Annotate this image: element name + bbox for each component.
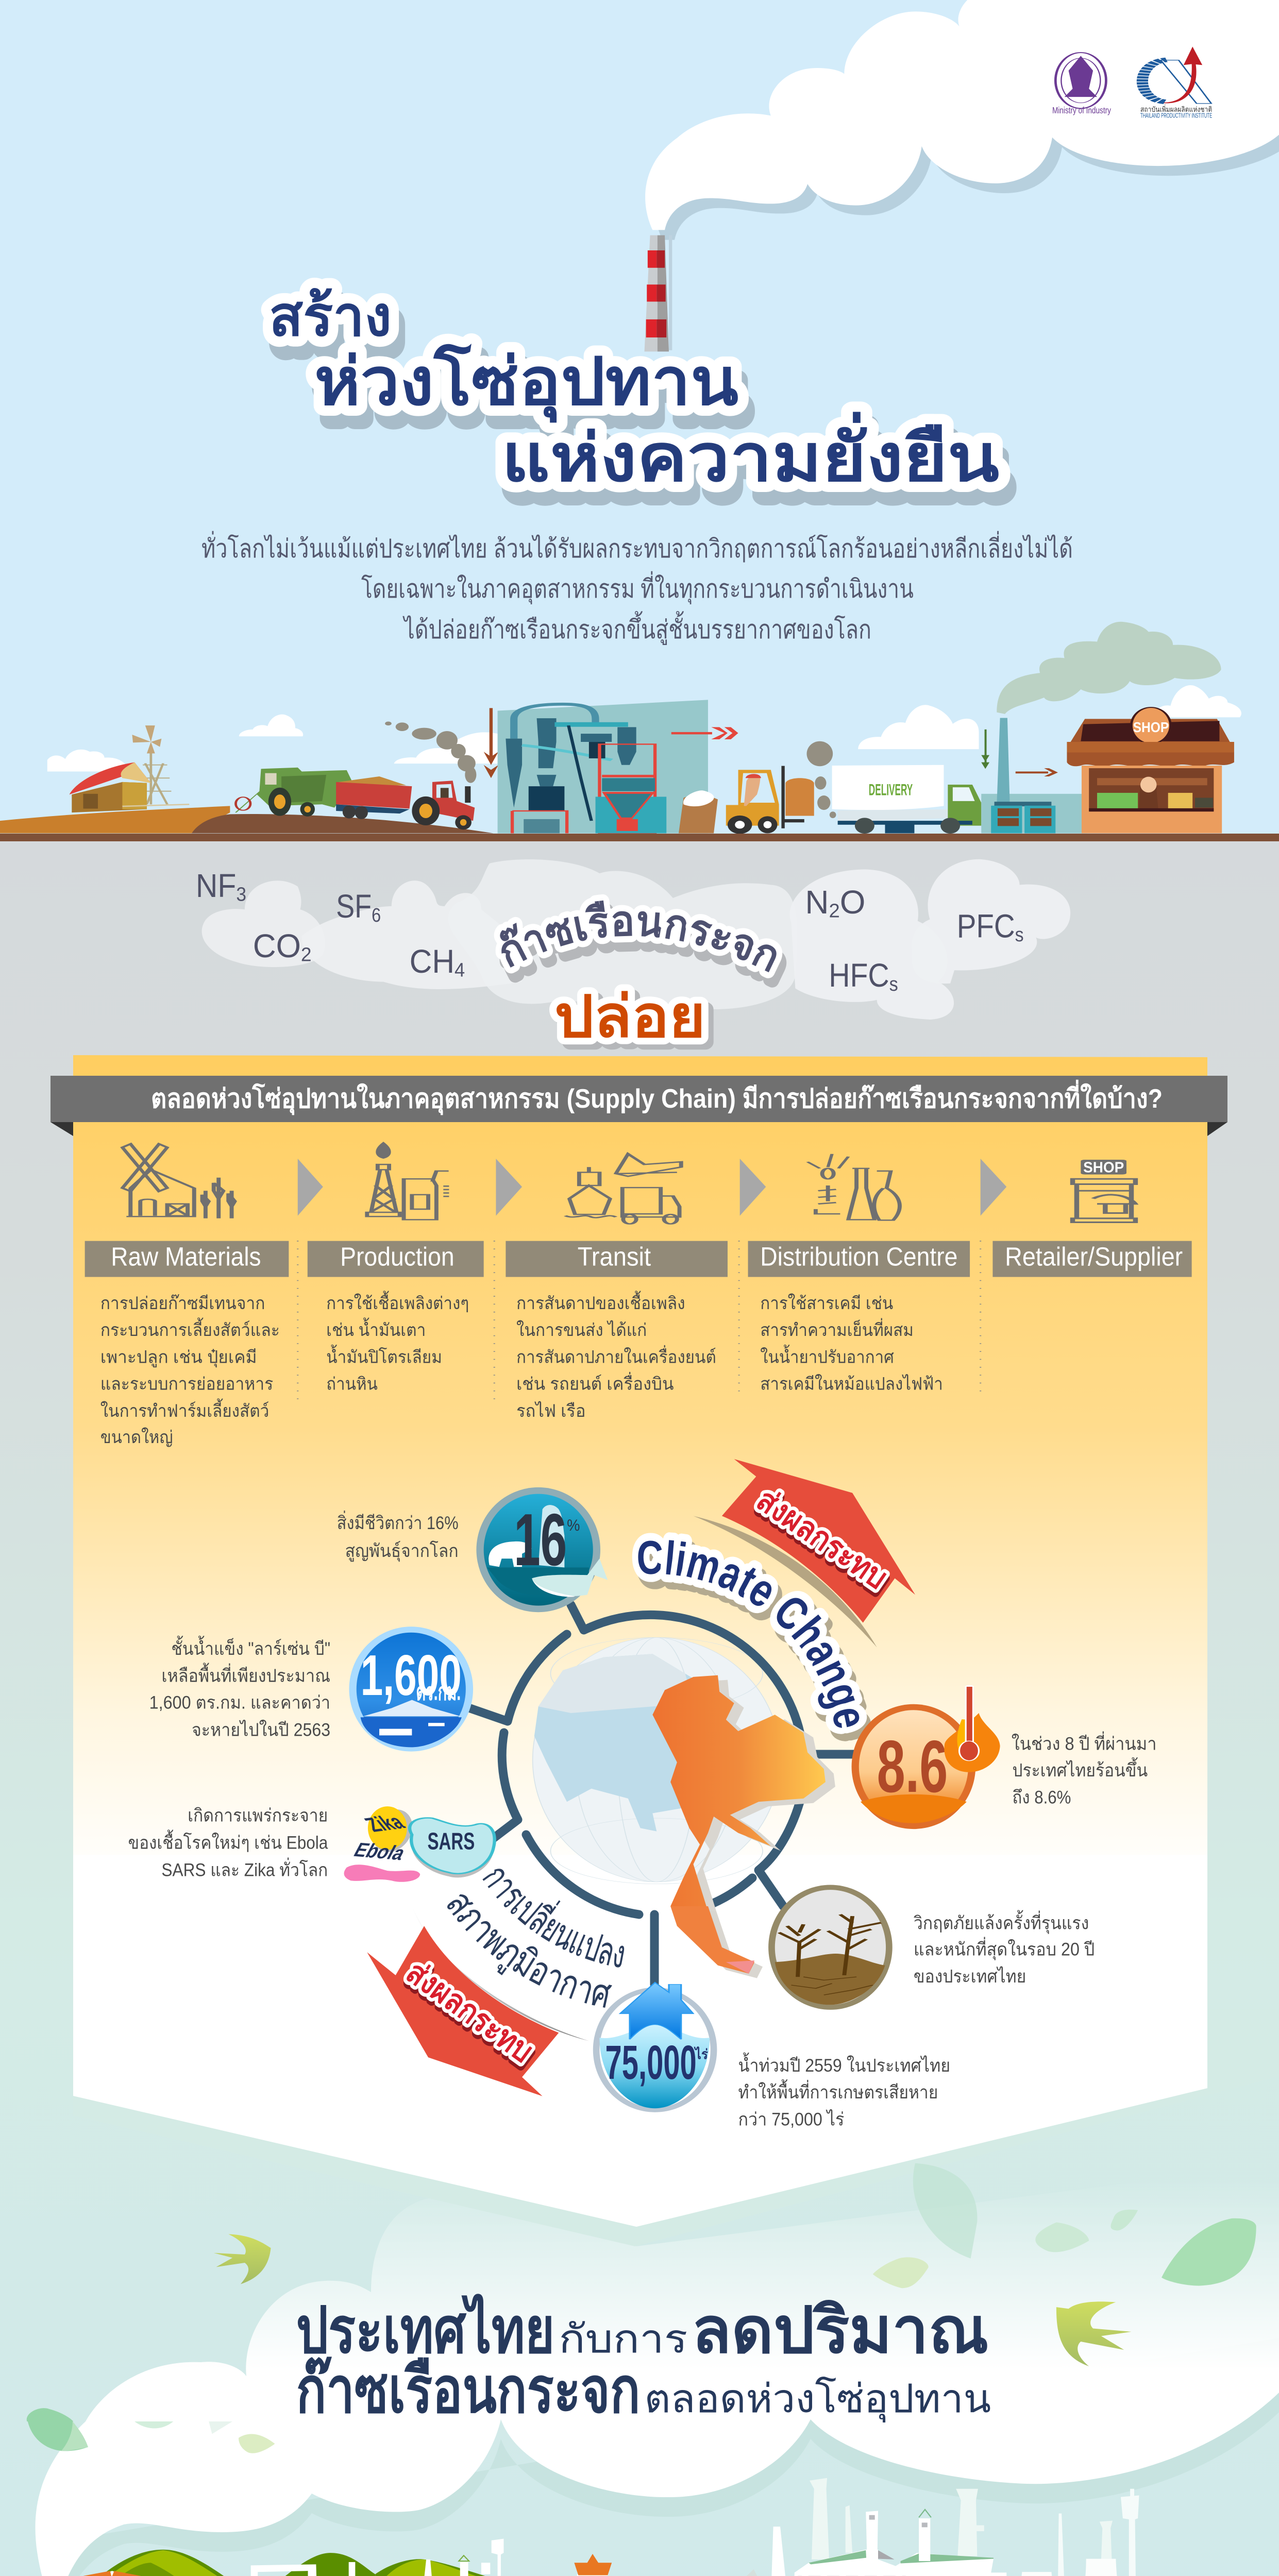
climate change diagram: ชั้นน้ำแข็ง "ลาร์เซ่น บี"	[171, 1636, 330, 1659]
gas formulas: N	[805, 884, 864, 921]
gas formulas: 2	[829, 900, 840, 922]
icon: combine harvester	[235, 768, 352, 817]
gas formulas: HFC	[829, 957, 997, 994]
climate change diagram: 16	[514, 1498, 567, 1581]
ground strip	[0, 834, 1279, 841]
heading: Thailand reducing greenhouse gas	[296, 2294, 991, 2426]
gas formulas: 2	[301, 943, 312, 965]
title: ห่วงโซ่อุปทาน	[321, 357, 745, 436]
icon: ship plane truck	[565, 1154, 681, 1224]
text: drought	[914, 1910, 1095, 1987]
climate change diagram: ทำให้พื้นที่การเกษตรเสียหาย	[738, 2079, 938, 2103]
gas formulas: 3	[236, 883, 246, 905]
supply chain stages: SHOP	[1083, 1159, 1124, 1176]
gas formulas: O	[840, 884, 865, 921]
label: Transit	[506, 1241, 728, 1277]
gas formulas: 4	[455, 959, 465, 981]
icon: wheat field and barn	[0, 762, 494, 833]
panel: industrial level	[650, 2478, 1207, 2576]
icon: green hills and town	[68, 2539, 628, 2576]
gas formulas: 6	[372, 904, 381, 926]
text: distribution detail	[760, 1293, 943, 1394]
climate change diagram: ของเชื้อโรคใหม่ๆ เช่น Ebola	[128, 1829, 328, 1853]
stat: diseases icons	[344, 1806, 495, 1882]
climate change diagram: 75,000	[605, 2036, 697, 2089]
text: temperature	[1012, 1731, 1157, 1807]
text: flood	[738, 2052, 950, 2129]
supply chain stages: เพาะปลูก เช่น ปุ๋ยเคมี	[100, 1347, 257, 1368]
icon: truck smoke	[806, 741, 836, 818]
gas formulas: CO	[253, 927, 375, 964]
globe	[533, 1637, 781, 1884]
text: larsen ice	[149, 1636, 330, 1740]
climate change diagram: สิ่งมีชีวิตกว่า 16%	[337, 1510, 459, 1533]
intro text: โดยเฉพาะในภาคอุตสาหกรรม ที่ในทุกกระบวนการดำเนินงาน	[361, 571, 914, 604]
climate change diagram: เกิดการแพร่กระจาย	[188, 1805, 328, 1825]
text: production detail	[326, 1291, 469, 1394]
icon: forklift	[726, 766, 814, 834]
climate change diagram	[128, 1459, 1157, 2129]
icon: tractor with trailer	[336, 776, 475, 829]
icon: shop	[1073, 1159, 1135, 1222]
stat: 16 percent	[476, 1487, 608, 1612]
text: transit detail	[516, 1291, 716, 1420]
gas formulas	[196, 867, 1024, 995]
supply chain stages: กระบวนการเลี้ยงสัตว์และ	[100, 1317, 280, 1340]
gas formulas: NF	[196, 867, 305, 904]
intro text: ทั่วโลกไม่เว้นแม้แต่ประเทศไทย ล้วนได้รับผลกระทบจากวิกฤตการณ์โลกร้อนอย่างหลีกเลี่ยงไม่ได้	[201, 531, 1073, 563]
stat: 8.6 percent: %	[948, 1742, 966, 1767]
supply chain stages: Raw Materials	[111, 1242, 261, 1271]
label: Production	[308, 1241, 484, 1277]
gas formulas: CH	[410, 943, 527, 980]
text: climate change thai curved: การเปลี่ยนแปลง	[482, 1869, 625, 1968]
white smoke cloud second section	[35, 2009, 1279, 2576]
icon: red arrow right	[671, 727, 738, 739]
logo: Ministry of Industry seal	[1052, 53, 1111, 115]
icon: windmill and wheat	[122, 1144, 235, 1218]
icon: birds	[214, 2234, 1131, 2366]
supply chain stages: ในการทำฟาร์มเลี้ยงสัตว์	[100, 1398, 269, 1420]
climate change diagram: SARS และ Zika ทั่วโลก	[161, 1857, 328, 1880]
icon: small arrows	[981, 730, 1058, 776]
heading: greenhouse gas curved: ก๊าซเรือนกระจก	[494, 894, 782, 978]
climate change diagram: สูญพันธุ์จากโลก	[345, 1540, 459, 1562]
text: climate change curved: Climate Change	[632, 1532, 867, 1734]
icon: delivery truck: DELIVERY	[869, 780, 913, 799]
text: temperature: ถึง 8.6%	[1012, 1787, 1071, 1807]
supply chain stages: และระบบการย่อยอาหาร	[100, 1375, 273, 1394]
label: Distribution Centre	[748, 1241, 970, 1277]
stat: drought	[768, 1885, 893, 2010]
text: s	[1015, 924, 1024, 946]
text: raw materials detail: ขนาดใหญ่	[100, 1428, 173, 1447]
text: production detail: ถ่านหิน	[326, 1375, 378, 1394]
icon: leaves lower left	[28, 2421, 275, 2453]
heading: Thailand reducing greenhouse gas: กับการ	[559, 2317, 687, 2361]
intro text	[201, 531, 1073, 645]
smoke cloud with logos	[645, 0, 1279, 240]
icon: shop	[1067, 707, 1234, 833]
supply chain stages: การใช้เชื้อเพลิงต่างๆ	[326, 1291, 469, 1313]
ribbon: top impact	[693, 1459, 915, 1647]
stat: 1,600 square km	[349, 1626, 473, 1752]
text: transit detail: รถไฟ เรือ	[516, 1401, 586, 1420]
icon: grey green stack smoke	[997, 622, 1221, 714]
icon: chemical flasks	[807, 1154, 900, 1220]
heading: release: ปล่อย	[560, 990, 711, 1054]
stat: 75,000 rai flood: ไร่	[694, 2046, 708, 2062]
panel: supply chain emissions	[73, 1055, 1207, 2227]
icon: warehouse with stack	[981, 718, 1087, 833]
climate change diagram: จะหายไปในปี 2563	[192, 1720, 330, 1740]
label: Transit: Transit	[578, 1242, 651, 1271]
text: drought: ของประเทศไทย	[914, 1966, 1026, 1987]
text: raw materials detail	[100, 1294, 280, 1447]
stat: diseases icons: Ebola	[350, 1839, 410, 1865]
climate change diagram: SARS	[427, 1828, 475, 1855]
supply chain stages	[85, 1143, 1192, 1447]
title: สร้าง	[269, 285, 392, 347]
title: ห่วงโซ่อุปทาน	[314, 343, 738, 423]
panel: national level	[68, 2539, 628, 2576]
supply chain stages: เช่น น้ำมันเตา	[326, 1317, 426, 1340]
ribbon: bottom impact: ส่งผลกระทบ	[400, 1955, 540, 2070]
icon: oil rig and can	[367, 1143, 449, 1219]
supply chain stages: การปล่อยก๊าซมีเทนจาก	[100, 1294, 265, 1313]
supply chain landscape illustration	[0, 622, 1241, 834]
icon: shop: SHOP	[1133, 719, 1169, 735]
heading: release: ปล่อย	[554, 985, 705, 1049]
supply chain stages: การใช้สารเคมี เช่น	[760, 1293, 893, 1313]
text: PFC	[957, 908, 1120, 944]
supply chain stages: เช่น รถยนต์ เครื่องบิน	[516, 1372, 674, 1394]
map of Thailand	[652, 1675, 835, 1911]
icon: leaves	[27, 2163, 1256, 2421]
text: species loss	[337, 1510, 459, 1562]
supply chain stages: การสันดาปของเชื้อเพลิง	[516, 1291, 685, 1313]
ribbon: bottom impact: ส่งผลกระทบ	[400, 1959, 540, 2074]
stat: 8.6 percent	[852, 1685, 1000, 1829]
icon: exhaust smoke	[385, 722, 476, 783]
title: แห่งความยั่งยืน	[501, 412, 999, 495]
banner: question	[51, 1076, 1227, 1136]
text: climate change curved: Climate Change	[638, 1541, 871, 1741]
gas formulas: s	[889, 973, 898, 995]
climate change diagram: เหลือพื้นที่เพียงประมาณ	[161, 1663, 330, 1686]
ribbon: bottom impact	[367, 1906, 589, 2096]
climate change diagram: ตร.กม.	[416, 1679, 461, 1705]
climate change diagram: 1,600	[361, 1643, 462, 1707]
logo: FTPI	[1140, 47, 1212, 119]
icon: factory machinery	[498, 700, 708, 833]
title: สร้าง	[275, 298, 398, 361]
heading: Thailand reducing greenhouse gas: ประเทศไทย	[296, 2294, 554, 2366]
icon: factory skyline	[701, 2478, 1153, 2576]
intro text: ได้ปล่อยก๊าซเรือนกระจกขึ้นสู่ชั้นบรรยากาศของโลก	[402, 611, 871, 645]
gas formulas: SF	[336, 888, 440, 925]
icon: small clouds	[47, 685, 1241, 771]
smoke cloud with logos: Ministry of Industry	[1052, 105, 1111, 115]
ribbon: top impact: ส่งผลกระทบ	[750, 1482, 894, 1596]
supply chain stages: ในน้ำยาปรับอากาศ	[760, 1345, 894, 1367]
stat: diseases icons: Zika	[359, 1810, 410, 1836]
factory chimney	[644, 235, 672, 351]
icon: sack	[679, 790, 718, 833]
text: climate change thai curved: สภาพภูมิอากาศ	[447, 1894, 612, 2008]
climate change diagram: 1,600 ตร.กม. และคาดว่า	[149, 1693, 330, 1713]
ring connectors	[469, 1605, 855, 1985]
banner: question: ตลอดห่วงโซ่อุปทานในภาคอุตสาหกรรม (Supply Chain) มีการปล่อยก๊าซเรือนกระจกจากที่ใดบ้าง?	[151, 1080, 1163, 1115]
climate change diagram: 8.6	[877, 1725, 948, 1808]
supply chain stages: ในการขนส่ง ได้แก่	[516, 1320, 647, 1340]
greenhouse gas clouds	[202, 859, 1070, 1020]
stat: 75,000 rai flood	[593, 1982, 717, 2112]
text: flood: กว่า 75,000 ไร่	[738, 2109, 844, 2129]
title	[269, 285, 1005, 509]
supply chain stages: การสันดาปภายในเครื่องยนต์	[516, 1345, 716, 1367]
icon: delivery truck	[832, 765, 981, 834]
supply chain stages: น้ำมันปิโตรเลียม	[326, 1345, 442, 1367]
supply chain stages: Production	[340, 1242, 455, 1271]
ribbon: top impact: ส่งผลกระทบ	[750, 1486, 894, 1600]
heading: greenhouse gas curved: ก๊าซเรือนกระจก	[500, 905, 786, 988]
text: disease spread	[128, 1805, 328, 1880]
title: แห่งความยั่งยืน	[508, 425, 1005, 509]
stat: 16 percent: %	[567, 1516, 580, 1534]
label: Raw Materials	[85, 1241, 289, 1277]
icon: chevrons	[298, 1159, 1006, 1216]
icon: down arrows	[484, 708, 498, 778]
label: Retailer/Supplier	[992, 1241, 1192, 1277]
supply chain stages: สารทำความเย็นที่ผสม	[760, 1318, 914, 1340]
icon: windmill	[132, 725, 171, 804]
